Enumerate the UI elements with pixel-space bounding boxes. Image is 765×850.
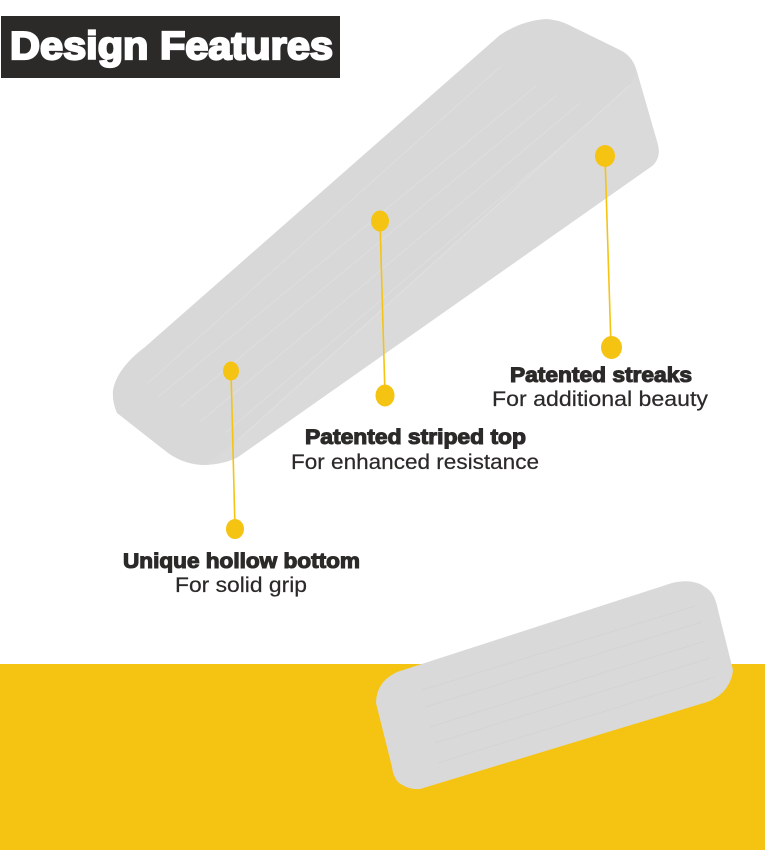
small wedge bottom view bbox=[376, 581, 733, 789]
title bbox=[1, 16, 340, 78]
yellow band bbox=[0, 664, 765, 850]
callout: streaks marker bbox=[595, 145, 622, 359]
wedge top stripes bbox=[148, 67, 590, 433]
label: patented striped top bbox=[291, 426, 539, 474]
title: Design Features bbox=[10, 25, 333, 68]
label: patented streaks bbox=[492, 364, 709, 411]
label: patented striped top: For enhanced resistance bbox=[291, 451, 539, 474]
small wedge stripes bbox=[422, 606, 715, 763]
large door wedge bbox=[113, 19, 659, 465]
label: patented streaks: Patented streaks bbox=[510, 364, 692, 387]
callout: hollow bottom marker bbox=[223, 362, 244, 539]
label: patented streaks: For additional beauty bbox=[492, 388, 709, 411]
label: unique hollow bottom bbox=[123, 550, 360, 597]
label: patented striped top: Patented striped top bbox=[305, 426, 526, 449]
label: unique hollow bottom: Unique hollow bottom bbox=[123, 550, 360, 573]
label: unique hollow bottom: For solid grip bbox=[175, 574, 307, 597]
wedge side face bbox=[205, 72, 659, 465]
callout: striped top marker bbox=[371, 210, 394, 406]
